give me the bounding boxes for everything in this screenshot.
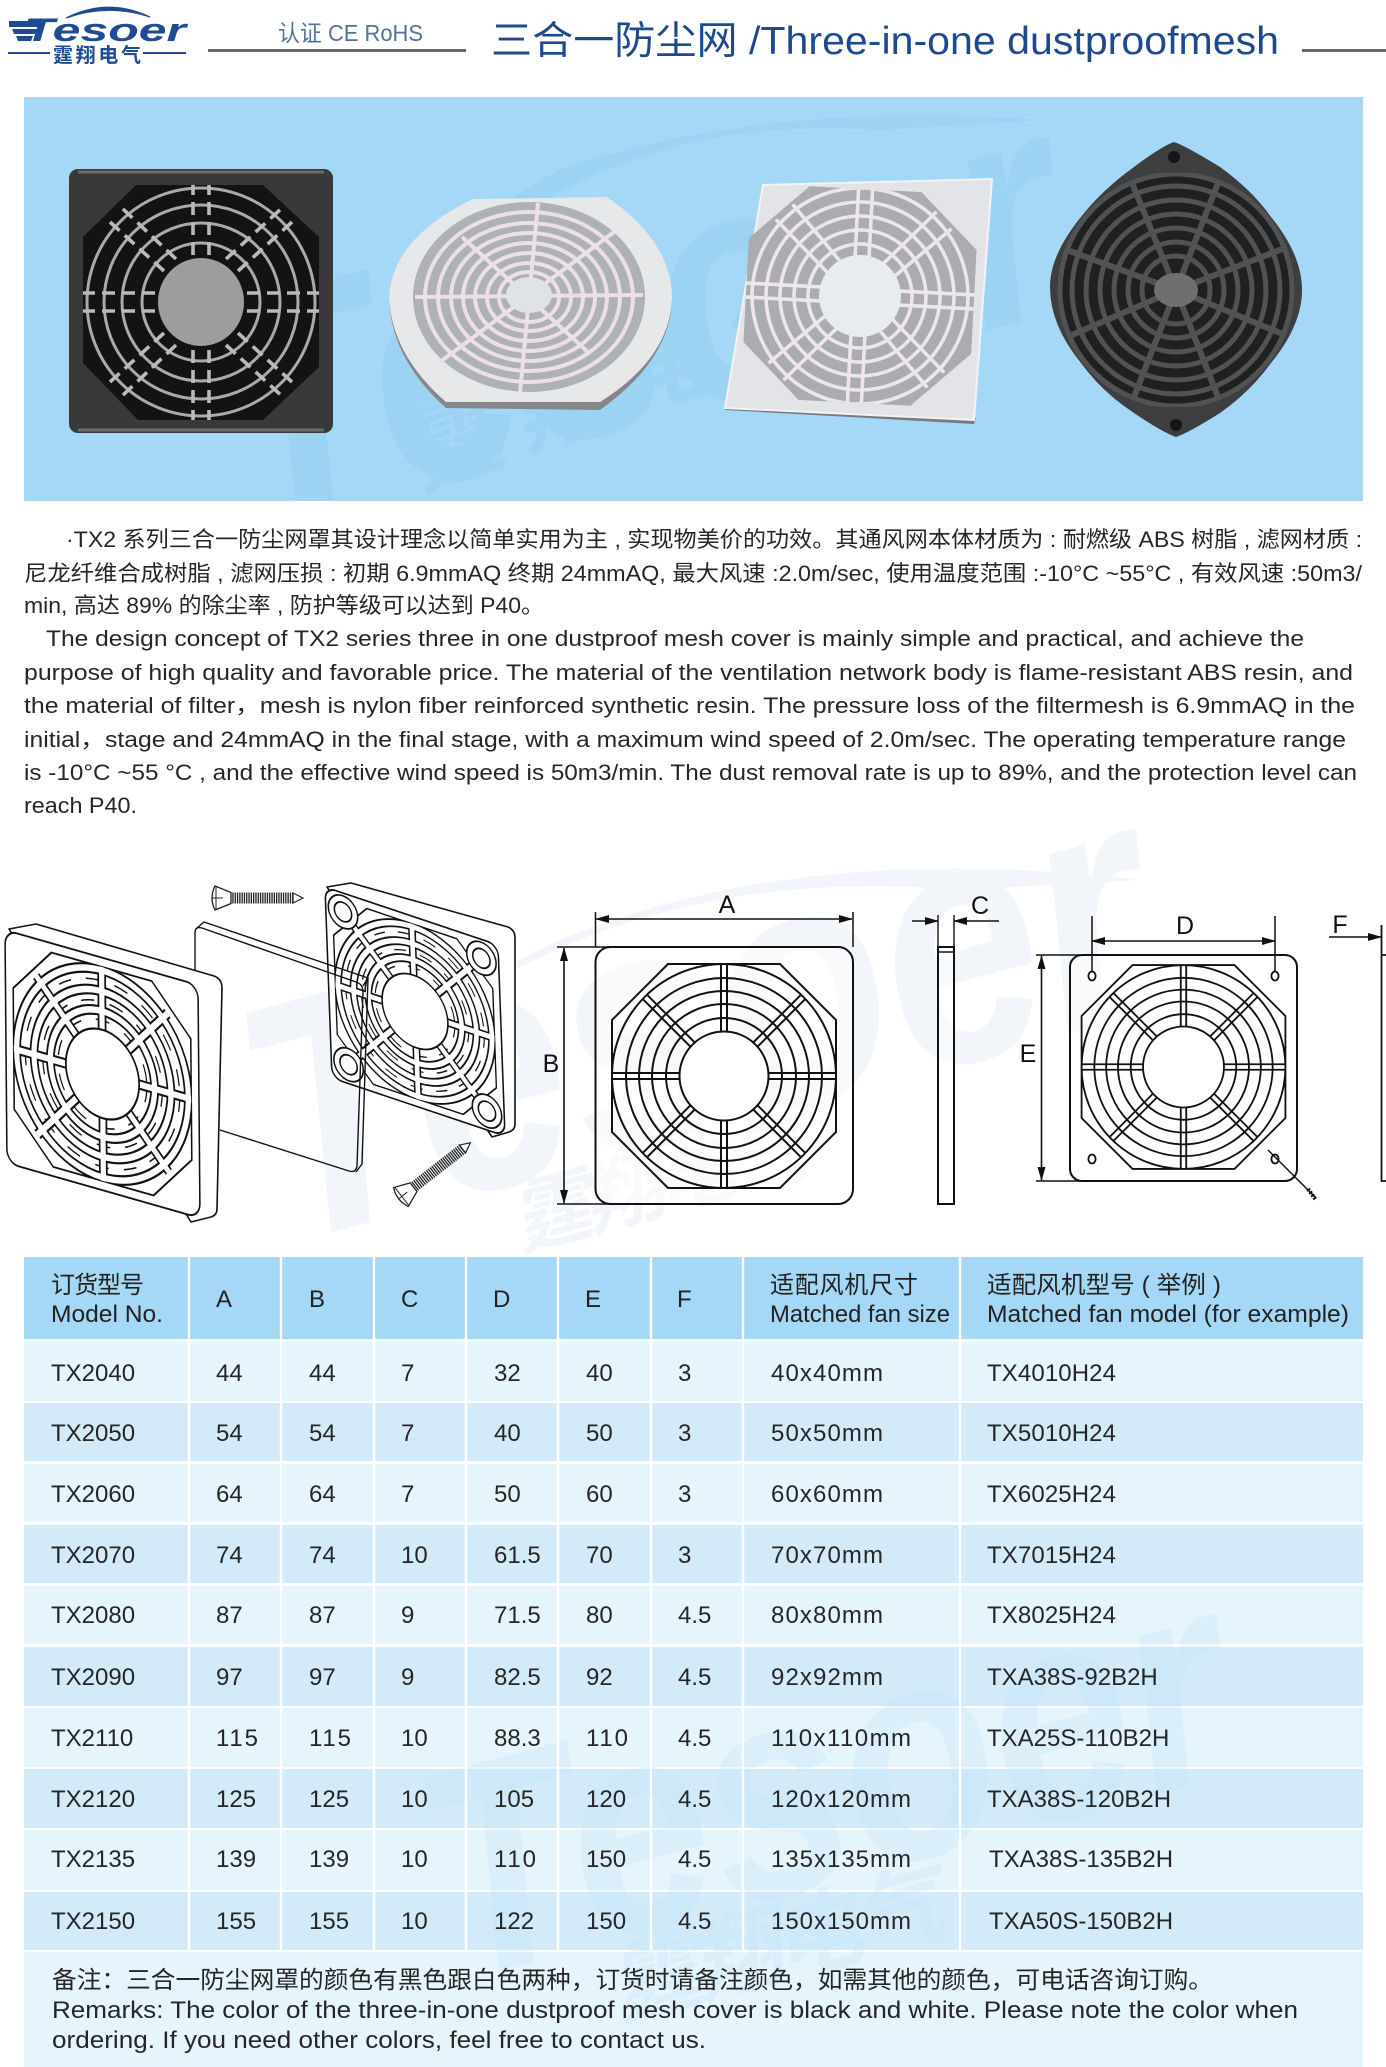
table rows: TX2110 [51,1725,133,1752]
table watermark: Tesoer [384,1505,1275,2045]
table rows: TX2040 [51,1360,135,1387]
title: 三合一防尘网 /Three-in-one dustproofmesh [491,20,1279,63]
table rows: 155 [309,1908,349,1935]
table rows: 87 [309,1602,336,1629]
table rows: 88.3 [494,1725,541,1752]
table rows: 105 [494,1786,534,1813]
table header text: B [309,1286,325,1313]
exploded view [5,883,515,1222]
table rows: 110x110mm [771,1725,911,1752]
table rows: 3 [678,1542,691,1569]
remarks: 备注：三合一防尘网罩的颜色有黑色跟白色两种，订货时请备注颜色，如需其他的颜色，可电话咨询订购。 [52,1967,1213,1994]
table rows: TX2080 [51,1602,135,1629]
table rows: TXA38S-92B2H [987,1664,1158,1691]
panel: diagrams [5,707,1386,1316]
table rows: TX2150 [51,1908,135,1935]
certification text: 认证 CE RoHS [278,20,423,46]
remarks: Remarks: The color of the three-in-one dustproof mesh cover is black and white. Please note the color when [52,1997,1298,2024]
panel: description text [24,527,1363,818]
header rule left [208,49,466,52]
table rows: 10 [401,1908,428,1935]
hero watermark: 霆翔电气 [391,259,843,510]
table header text: Matched fan model (for example) [987,1301,1349,1328]
table rows: TX5010H24 [987,1420,1116,1447]
table rows [51,1360,1173,1935]
table rows: 97 [216,1664,243,1691]
table rows: TX4010H24 [987,1360,1116,1387]
table rows: 3 [678,1360,691,1387]
filter sheet [195,922,368,1172]
table header background [24,1257,1363,1339]
table rows: 50x50mm [771,1420,883,1447]
table header text: Model No. [51,1301,163,1328]
table header text: 订货型号 [51,1272,144,1299]
label B: B [543,1050,559,1078]
table rows: 64 [309,1481,336,1508]
table rows: TX6025H24 [987,1481,1116,1508]
side view F [1329,911,1386,1181]
Chinese description: ·TX2 系列三合一防尘网罩其设计理念以简单实用为主 , 实现物美价的功效。其通风网本体材质为 : 耐燃级 ABS 树脂 , 滤网材质 : [66,527,1362,552]
table header text: A [216,1286,232,1313]
table rows: 32 [494,1360,521,1387]
Chinese description: 尼龙纤维合成树脂 , 滤网压损 : 初期 6.9mmAQ 终期 24mmAQ, 最大风速 :2.0m/sec, 使用温度范围 :-10°C ~55°C , 有效风速 :50m3/ [24,561,1363,586]
table watermark: 霆翔电气 [599,1852,964,2039]
table rows: 80x80mm [771,1602,883,1629]
English description: The design concept of TX2 series three in one dustproof mesh cover is mainly simple and practical, and achieve the [46,626,1304,651]
table rows: 9 [401,1664,414,1691]
table rows: 74 [309,1542,336,1569]
table rows: 110 [494,1846,536,1873]
table rows: 10 [401,1786,428,1813]
table rows: 61.5 [494,1542,541,1569]
Chinese description [24,527,1363,618]
table rows: 97 [309,1664,336,1691]
table rows: 40 [586,1360,613,1387]
table rows: 10 [401,1542,428,1569]
English description: initial，stage and 24mmAQ in the final stage, with a maximum wind speed of 2.0m/sec. The operating temperature range [24,727,1346,752]
hero background [24,97,1363,501]
English description: purpose of high quality and favorable price. The material of the ventilation network body is flame-resistant ABS resin, and [24,660,1353,685]
header [8,7,1386,67]
English description: is -10°C ~55 °C , and the effective wind speed is 50m3/min. The dust removal rate is up to 89%, and the protection level can [24,760,1357,785]
table rows: TXA25S-110B2H [987,1725,1169,1752]
dimension view D/E [1020,912,1316,1200]
table header text: E [585,1286,601,1313]
photo: white square grille [725,179,992,424]
table rows: 115 [216,1725,258,1752]
table rows: 139 [216,1846,256,1873]
label E: E [1020,1040,1036,1068]
table header text: D [493,1286,510,1313]
header rule right [1302,49,1386,52]
table rows: 80 [586,1602,613,1629]
table rows: 92x92mm [771,1664,883,1691]
table rows: 54 [216,1420,243,1447]
photo: black square grille [69,169,333,433]
English description: reach P40. [24,793,137,818]
table rows: 4.5 [678,1846,711,1873]
table rows: TX7015H24 [987,1542,1116,1569]
left frame [5,924,222,1222]
table rows: 44 [309,1360,336,1387]
table rows: 150x150mm [771,1908,911,1935]
screw top [212,886,303,910]
table rows: TX2090 [51,1664,135,1691]
dimension view A/B [543,891,853,1204]
hero watermark [418,314,716,474]
table rows: 40 [494,1420,521,1447]
column separators [189,1257,960,1950]
English description: the material of filter，mesh is nylon fiber reinforced synthetic resin. The pressure loss of the filtermesh is 6.9mmAQ in the [24,693,1355,718]
side view C [912,892,999,1204]
logo: Tesoer [8,7,188,67]
logo: Tesoer: Tesoer [24,12,188,48]
table rows: 125 [309,1786,349,1813]
photo: white round grille [389,197,672,410]
table rows: 87 [216,1602,243,1629]
row stripes [24,1342,1363,2067]
table rows: 7 [401,1420,414,1447]
table rows: 40x40mm [771,1360,883,1387]
table rows: TX2120 [51,1786,135,1813]
table rows: 4.5 [678,1602,711,1629]
table rows: 82.5 [494,1664,541,1691]
label F: F [1332,911,1348,939]
table rows: 70 [586,1542,613,1569]
table rows: 4.5 [678,1664,711,1691]
table header text: C [401,1286,418,1313]
table header text: Matched fan size [770,1301,950,1328]
table rows: 4.5 [678,1908,711,1935]
table rows: 60x60mm [771,1481,883,1508]
table rows: 7 [401,1481,414,1508]
table rows: TXA50S-150B2H [989,1908,1173,1935]
remarks: ordering. If you need other colors, feel free to contact us. [52,2027,706,2054]
table rows: 70x70mm [771,1542,883,1569]
table header text: 适配风机型号 ( 举例 ) [987,1272,1221,1299]
table rows: TX2135 [51,1846,135,1873]
table rows: 3 [678,1481,691,1508]
remarks [52,1967,1298,2054]
table rows: 9 [401,1602,414,1629]
label A: A [719,891,736,919]
table rows: TX8025H24 [987,1602,1116,1629]
right frame [325,883,515,1137]
table rows: 60 [586,1481,613,1508]
table rows: 135x135mm [771,1846,911,1873]
table header text [51,1272,1349,1328]
table rows: TXA38S-120B2H [987,1786,1171,1813]
table rows: 54 [309,1420,336,1447]
table rows: 74 [216,1542,243,1569]
diagram watermark: Tesoer [202,707,1202,1316]
table rows: 120 [586,1786,626,1813]
English description [24,626,1357,818]
table rows: 71.5 [494,1602,541,1629]
table rows: 50 [586,1420,613,1447]
logo: Tesoer: 霆翔电气 [53,44,141,67]
table rows: 110 [586,1725,628,1752]
table header text: F [677,1286,692,1313]
table rows: 4.5 [678,1786,711,1813]
table rows: 125 [216,1786,256,1813]
table rows: 44 [216,1360,243,1387]
Chinese description: min, 高达 89% 的除尘率 , 防护等级可以达到 P40。 [24,593,544,618]
table rows: 50 [494,1481,521,1508]
table rows: 7 [401,1360,414,1387]
table rows: TX2070 [51,1542,135,1569]
table rows: 115 [309,1725,351,1752]
panel: product photos [24,97,1363,501]
table rows: 10 [401,1846,428,1873]
table rows: 139 [309,1846,349,1873]
label C: C [971,892,989,920]
table rows: 150 [586,1846,626,1873]
table rows: 120x120mm [771,1786,911,1813]
table rows: TX2060 [51,1481,135,1508]
screw bottom [391,1133,478,1208]
table rows: 92 [586,1664,613,1691]
table header text: 适配风机尺寸 [770,1272,918,1299]
table rows: TXA38S-135B2H [989,1846,1173,1873]
table rows: 122 [494,1908,534,1935]
table rows: 4.5 [678,1725,711,1752]
label D: D [1176,912,1194,940]
table rows: TX2050 [51,1420,135,1447]
table rows: 3 [678,1420,691,1447]
photo: black round grille [1050,142,1302,437]
table rows: 64 [216,1481,243,1508]
table rows: 155 [216,1908,256,1935]
table rows: 150 [586,1908,626,1935]
diagram watermark: 霆翔电气 [501,1100,824,1266]
table rows: 10 [401,1725,428,1752]
table: models and dimensions [24,1257,1363,2067]
